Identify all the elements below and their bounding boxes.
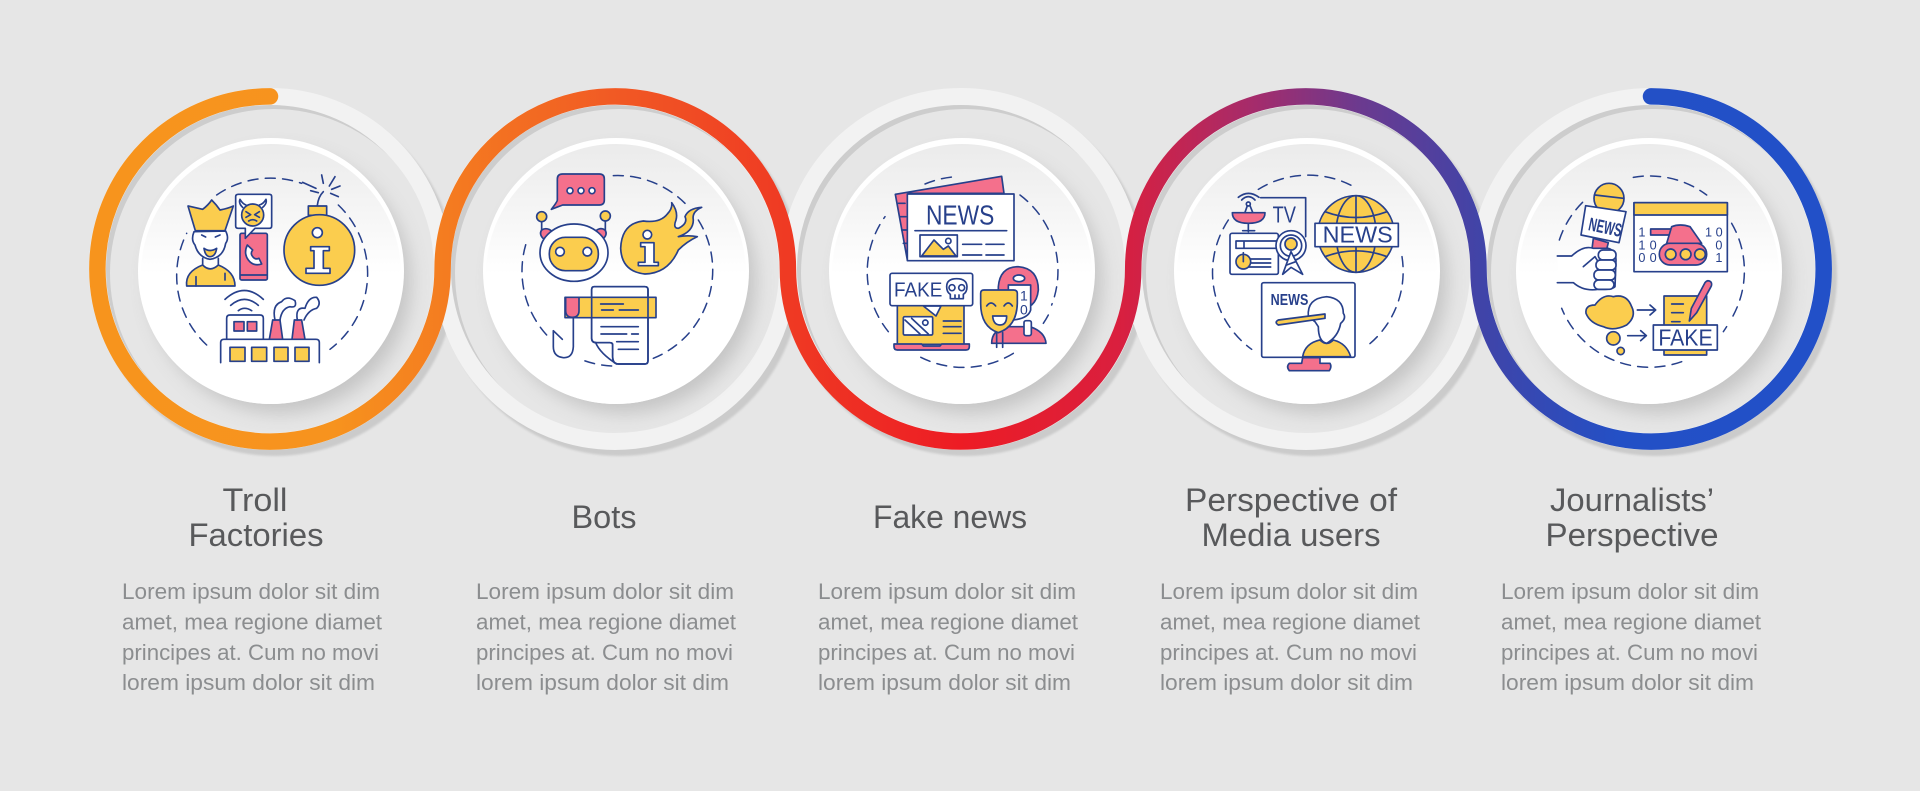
- body text: amet, mea regione diamet: [1160, 610, 1420, 634]
- body text: principes at. Cum no movi: [1160, 640, 1417, 665]
- icon: journalists: 0: [1715, 238, 1722, 252]
- disc: [1516, 138, 1789, 413]
- icon: journalists: 10: [1638, 238, 1657, 252]
- icon: fake news: 0: [1020, 301, 1028, 317]
- ring base: pale loops behind the ribbon: [94, 94, 1837, 456]
- heading: Journalists' Perspective: Journalists’: [1550, 482, 1714, 518]
- panel: Fake news: [818, 138, 1102, 695]
- gradient ribbon weaving through the five circles: [97, 96, 1824, 442]
- body text: principes at. Cum no movi: [122, 640, 379, 665]
- icon: journalists: FAKE: [1658, 325, 1713, 351]
- icon: fake news: FAKE: [894, 279, 942, 302]
- icon: troll factory: [177, 175, 368, 363]
- heading: Troll Factories: Factories: [188, 517, 324, 553]
- body text: Lorem ipsum dolor sit dim: [476, 579, 734, 604]
- icon: fake news: NEWS: [926, 200, 994, 231]
- body text: amet, mea regione diamet: [122, 610, 382, 634]
- panel: Bots: [476, 138, 756, 695]
- body text: amet, mea regione diamet: [476, 610, 736, 634]
- icon: journalists: NEWS: [1587, 213, 1624, 241]
- body text: lorem ipsum dolor sit dim: [1160, 670, 1413, 695]
- body text: Lorem ipsum dolor sit dim: [818, 579, 1076, 604]
- heading: Perspective of Media users: Perspective of: [1185, 482, 1397, 518]
- heading: Perspective of Media users: Media users: [1202, 517, 1380, 553]
- icon: media users: NEWS: [1271, 292, 1308, 309]
- disc: [483, 138, 756, 413]
- disc: [1174, 138, 1447, 413]
- body text: Lorem ipsum dolor sit dim: [1501, 579, 1759, 604]
- icon: fake news: 1: [1020, 288, 1028, 304]
- icon: media users: TV: [1273, 201, 1297, 227]
- body text: Lorem ipsum dolor sit dim: [122, 579, 380, 604]
- icon: journalists: 00: [1638, 251, 1657, 265]
- heading: Journalists' Perspective: Perspective: [1546, 517, 1718, 553]
- icon: journalists: 10: [1705, 226, 1723, 240]
- body text: principes at. Cum no movi: [1501, 640, 1758, 665]
- body text: lorem ipsum dolor sit dim: [1501, 670, 1754, 695]
- icon: media users: NEWS: [1323, 222, 1393, 248]
- icon: journalists: [1557, 176, 1744, 367]
- heading: Bots: Bots: [572, 499, 636, 535]
- icon: bots: [522, 174, 713, 366]
- body text: amet, mea regione diamet: [818, 610, 1078, 634]
- panel: Perspective of Media users: [1160, 138, 1447, 695]
- body text: lorem ipsum dolor sit dim: [818, 670, 1071, 695]
- disc: [138, 138, 411, 413]
- icon: media users: [1213, 175, 1403, 371]
- body text: principes at. Cum no movi: [476, 640, 733, 665]
- heading: Troll Factories: Troll: [222, 482, 288, 518]
- panel: Troll Factories: [122, 138, 411, 695]
- body text: Lorem ipsum dolor sit dim: [1160, 579, 1418, 604]
- heading: Fake news: Fake news: [873, 499, 1027, 535]
- icon: fake news: [867, 176, 1058, 367]
- body text: lorem ipsum dolor sit dim: [122, 670, 375, 695]
- panel: Journalists' Perspective: [1501, 138, 1789, 695]
- body text: amet, mea regione diamet: [1501, 610, 1761, 634]
- body text: lorem ipsum dolor sit dim: [476, 670, 729, 695]
- icon: journalists: 1: [1715, 251, 1722, 265]
- body text: principes at. Cum no movi: [818, 640, 1075, 665]
- icon: journalists: 1: [1638, 226, 1645, 240]
- disc: [829, 138, 1102, 413]
